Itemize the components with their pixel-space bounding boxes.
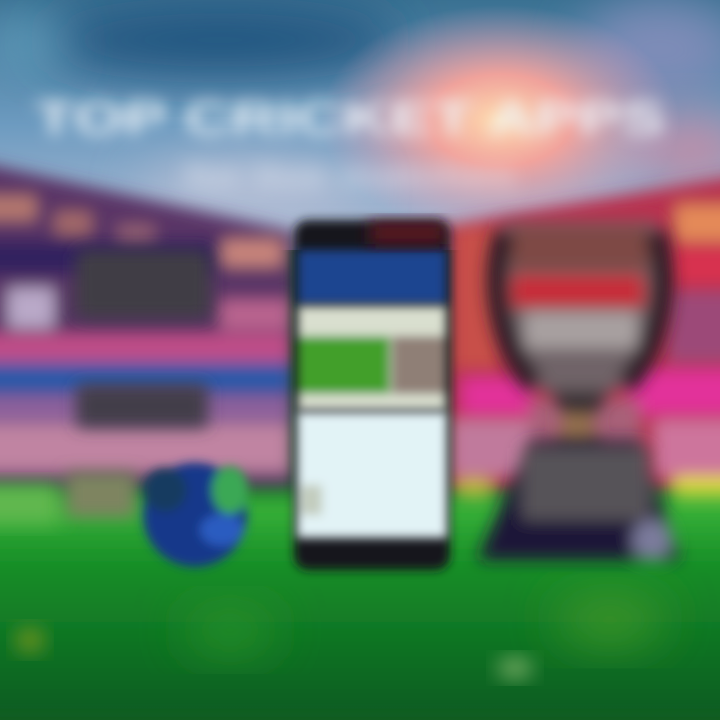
left feature icons (66, 250, 210, 518)
subtitle: for live matches (185, 160, 515, 193)
grass field (0, 484, 720, 720)
icon: stats panel bottom (66, 472, 136, 518)
title: TOP CRICKET APPS (35, 92, 665, 144)
icon: stats panel middle (76, 384, 208, 428)
phone header (298, 250, 446, 304)
icon: globe (143, 463, 248, 567)
stadium stands (0, 160, 720, 524)
trophy stem (550, 390, 610, 445)
smartphone (294, 220, 450, 570)
trophy handles (498, 232, 535, 385)
sky background (0, 0, 720, 250)
trophy (478, 222, 680, 560)
phone content card (297, 412, 447, 538)
trophy base (478, 440, 680, 560)
icon: stats panel top (76, 250, 210, 318)
trophy cup (500, 222, 660, 400)
phone pitch image (298, 306, 446, 410)
